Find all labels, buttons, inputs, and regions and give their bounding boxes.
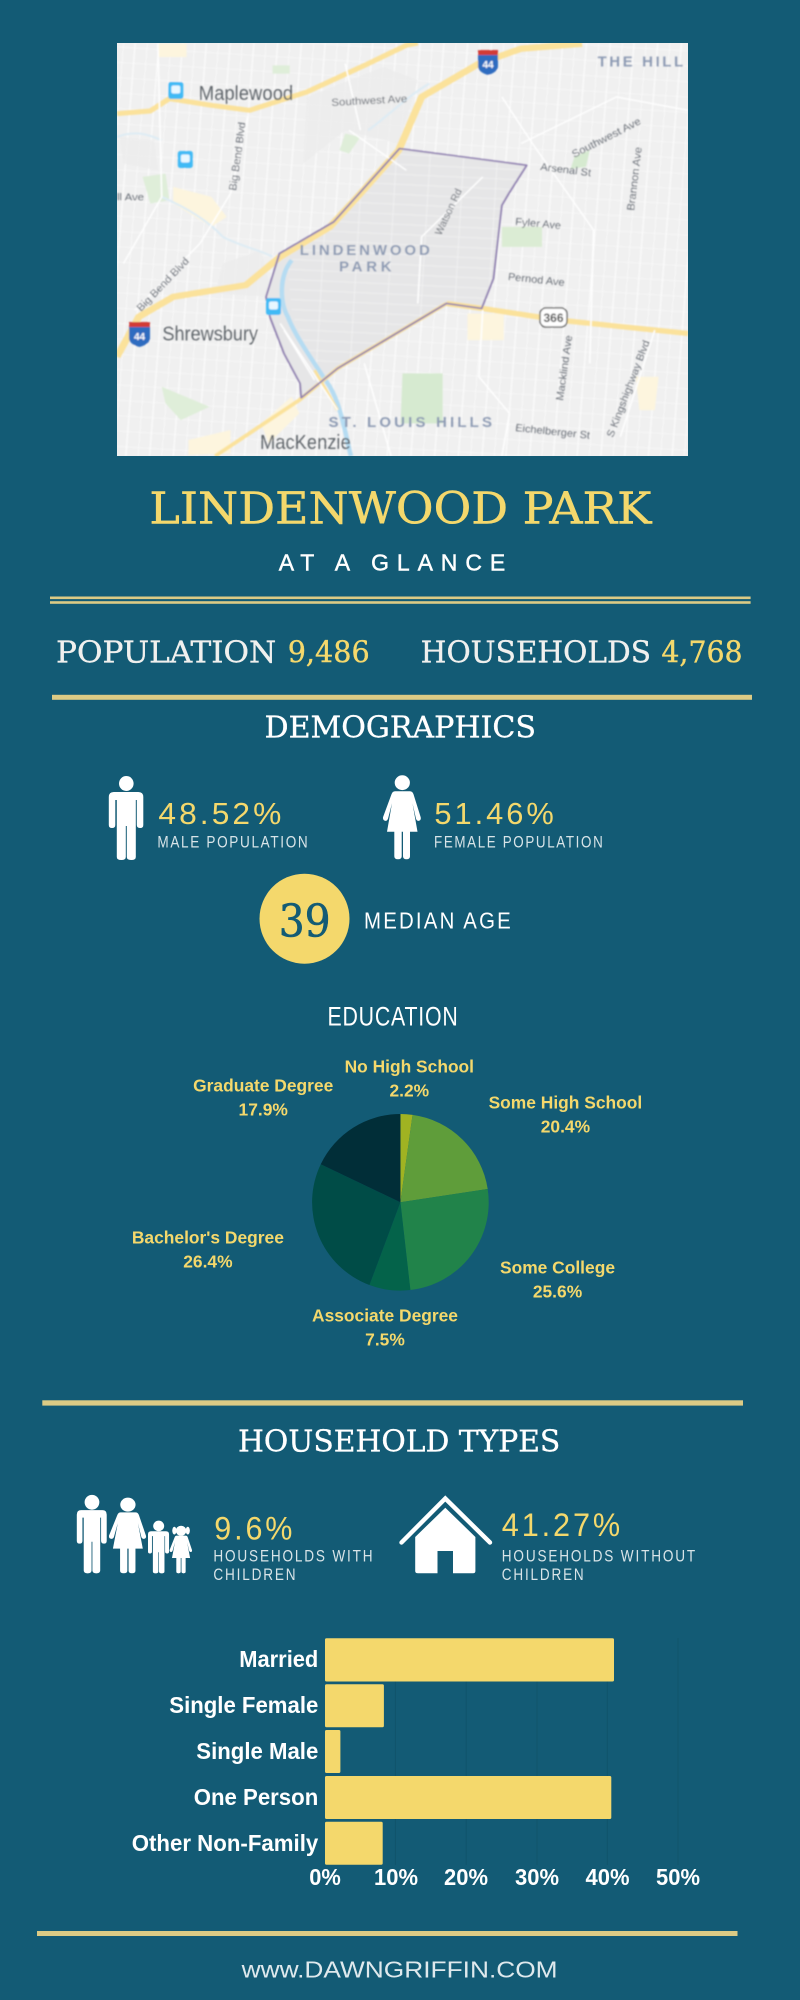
households with children stat: 9.6% bbox=[214, 1510, 295, 1546]
pie label: bachelor's degree: Bachelor's Degree bbox=[132, 1227, 284, 1247]
heading: education: EDUCATION bbox=[328, 1002, 458, 1032]
map labels: Maplewood bbox=[199, 83, 293, 105]
white connecting streets bbox=[123, 44, 688, 456]
map labels: Watson Rd bbox=[433, 187, 465, 237]
map labels: Pernod Ave bbox=[507, 271, 565, 289]
pie label: associate degree bbox=[312, 1306, 458, 1350]
icon: family bbox=[77, 1495, 192, 1573]
heading: demographics: DEMOGRAPHICS bbox=[264, 711, 536, 746]
icon: female figure bbox=[383, 775, 421, 859]
female population stat: 51.46% bbox=[434, 796, 557, 831]
female population stat: FEMALE POPULATION bbox=[434, 833, 604, 851]
divider bbox=[52, 695, 752, 700]
pie label: some college: 25.6% bbox=[533, 1281, 582, 1301]
map labels: S Kingshighway Blvd bbox=[605, 338, 653, 439]
female population stat bbox=[434, 796, 604, 851]
male population stat bbox=[157, 796, 309, 851]
map labels: ST. LOUIS HILLS bbox=[328, 414, 492, 431]
bar chart: household types: Married bbox=[239, 1646, 318, 1672]
parks bbox=[401, 373, 443, 423]
male population stat: 48.52% bbox=[158, 796, 284, 831]
population stat: POPULATION bbox=[56, 635, 276, 669]
bar chart: household types: 10% bbox=[374, 1864, 418, 1890]
pie label: some college: Some College bbox=[500, 1257, 615, 1277]
boundary bbox=[266, 149, 527, 398]
footer url: www.DAWNGRIFFIN.COM bbox=[240, 1957, 558, 1983]
households without children stat bbox=[502, 1507, 697, 1584]
bar chart: household types: Single Female bbox=[169, 1692, 318, 1718]
pie label: associate degree: Associate Degree bbox=[312, 1306, 458, 1326]
pie label: no high school bbox=[345, 1056, 474, 1100]
map labels: 44 bbox=[134, 332, 145, 343]
double divider bbox=[50, 596, 751, 604]
median age badge bbox=[260, 874, 350, 964]
map labels: Big Bend Blvd bbox=[227, 121, 249, 191]
bar chart: household types: 20% bbox=[444, 1864, 488, 1890]
map labels: THE HILL bbox=[598, 54, 686, 71]
map labels: Brannon Ave bbox=[625, 146, 645, 211]
bar chart: household types: One Person bbox=[194, 1784, 318, 1810]
population stat: 9,486 bbox=[288, 635, 370, 669]
pie label: some high school: 20.4% bbox=[541, 1116, 590, 1136]
pie label: graduate degree: Graduate Degree bbox=[193, 1075, 334, 1095]
population stat bbox=[56, 635, 370, 669]
bar chart: household types: 40% bbox=[586, 1864, 630, 1890]
pie label: no high school: 2.2% bbox=[389, 1080, 429, 1100]
households with children stat: CHILDREN bbox=[213, 1566, 297, 1584]
pie label: graduate degree: 17.9% bbox=[239, 1099, 288, 1119]
bar chart: household types: Single Male bbox=[196, 1738, 318, 1764]
map labels: Southwest Ave bbox=[570, 115, 643, 161]
median age badge: 39 bbox=[279, 895, 331, 948]
households with children stat bbox=[213, 1510, 374, 1584]
pie label: associate degree: 7.5% bbox=[365, 1330, 405, 1350]
map labels: Arsenal St bbox=[540, 161, 592, 179]
households with children stat: HOUSEHOLDS WITH bbox=[213, 1548, 374, 1566]
highways bbox=[117, 44, 582, 357]
households stat: HOUSEHOLDS bbox=[421, 635, 651, 669]
title: LINDENWOOD PARK bbox=[149, 483, 653, 534]
male population stat: MALE POPULATION bbox=[157, 833, 309, 851]
map labels: Southwest Ave bbox=[331, 93, 408, 109]
map labels: Macklind Ave bbox=[554, 334, 575, 401]
pie chart: education bbox=[312, 1114, 489, 1291]
map labels: MacKenzie bbox=[260, 432, 351, 454]
bar chart: household types bbox=[132, 1638, 700, 1890]
households without children stat: HOUSEHOLDS WITHOUT bbox=[502, 1548, 697, 1566]
map labels bbox=[117, 50, 686, 454]
map of Lindenwood Park bbox=[117, 43, 688, 456]
bar chart: household types: 30% bbox=[515, 1864, 559, 1890]
divider bbox=[37, 1931, 738, 1936]
map labels: 366 bbox=[543, 311, 564, 325]
icon: house bbox=[402, 1498, 490, 1573]
map labels: Shrewsbury bbox=[162, 324, 258, 346]
map labels: ll Ave bbox=[117, 192, 144, 204]
bar chart: household types: 0% bbox=[309, 1864, 341, 1890]
map labels: Big Bend Blvd bbox=[135, 255, 192, 314]
pie label: bachelor's degree: 26.4% bbox=[183, 1251, 233, 1271]
median age label: MEDIAN AGE bbox=[364, 908, 513, 934]
bar chart: household types: 50% bbox=[656, 1864, 700, 1890]
neighbourhood fill bbox=[266, 149, 527, 398]
households without children stat: CHILDREN bbox=[502, 1566, 586, 1584]
households without children stat: 41.27% bbox=[502, 1507, 623, 1543]
map labels: Fyler Ave bbox=[515, 216, 562, 232]
map labels: Eichelberger St bbox=[515, 422, 591, 442]
subtitle: AT A GLANCE bbox=[279, 550, 505, 576]
map labels: PARK bbox=[339, 259, 392, 276]
pie label: graduate degree bbox=[193, 1075, 334, 1119]
pie label: some high school bbox=[489, 1092, 642, 1136]
households stat: 4,768 bbox=[661, 635, 743, 669]
pie label: bachelor's degree bbox=[132, 1227, 284, 1271]
divider bbox=[42, 1400, 743, 1406]
icon: male figure bbox=[109, 776, 143, 860]
map labels: LINDENWOOD bbox=[300, 242, 430, 259]
pie label: no high school: No High School bbox=[345, 1056, 474, 1076]
river bbox=[282, 260, 351, 456]
heading: household types: HOUSEHOLD TYPES bbox=[238, 1425, 560, 1460]
bar chart: household types: Other Non-Family bbox=[132, 1830, 318, 1856]
map labels: 44 bbox=[482, 60, 494, 71]
pie label: some college bbox=[500, 1257, 615, 1301]
pie label: some high school: Some High School bbox=[489, 1092, 642, 1112]
